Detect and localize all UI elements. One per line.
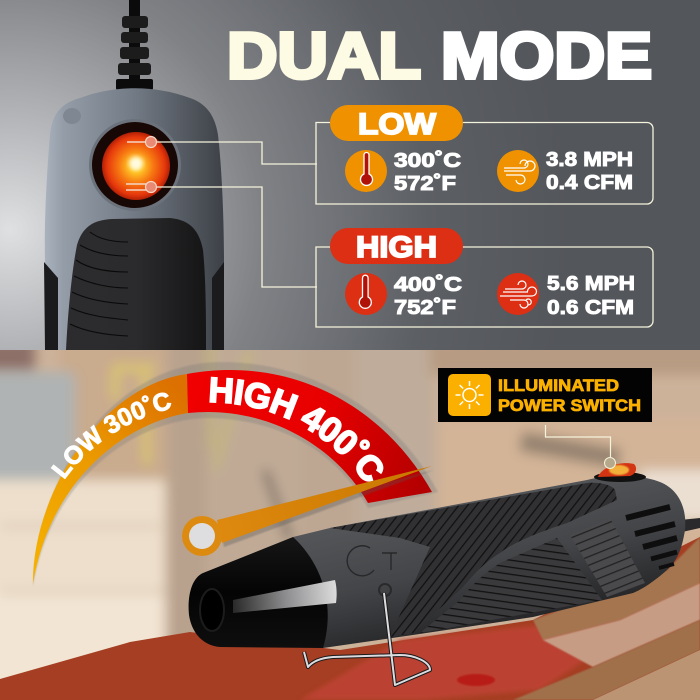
high temperature: 400˚C bbox=[394, 273, 462, 296]
icon: power cord bbox=[116, 0, 153, 90]
high marker bbox=[126, 182, 156, 192]
low temperature bbox=[394, 149, 461, 195]
wooden edge strip bbox=[513, 620, 700, 700]
wire stand bbox=[304, 584, 430, 685]
glowing switch lamp bbox=[102, 132, 170, 200]
gauge: temperature arc bbox=[32, 362, 438, 584]
nozzle bbox=[189, 537, 328, 648]
low pill bbox=[330, 105, 463, 141]
low marker bbox=[127, 136, 156, 148]
high airflow values: 5.6 MPH bbox=[547, 273, 635, 295]
low temperature: 300˚C bbox=[394, 149, 461, 172]
panel: workshop photo background bbox=[0, 350, 700, 679]
high heading: HIGH bbox=[356, 231, 437, 264]
illustration: remote switch device bbox=[44, 0, 224, 350]
brighter red paint bbox=[300, 625, 600, 700]
icon: low airflow bbox=[497, 150, 539, 192]
high temperature: 752˚F bbox=[394, 296, 456, 319]
lower ridged panel bbox=[420, 538, 602, 633]
gauge needle bbox=[182, 466, 434, 556]
low airflow values: 0.4 CFM bbox=[546, 172, 633, 194]
callout: illuminated power switch bbox=[438, 368, 652, 422]
cord bbox=[680, 518, 700, 532]
device black grip bbox=[66, 218, 206, 350]
leader line: callout to switch bbox=[546, 425, 616, 468]
paint spot bbox=[457, 674, 495, 686]
low frame bbox=[316, 122, 653, 204]
title bbox=[227, 19, 652, 92]
device dimple bbox=[63, 108, 81, 124]
icon: low thermometer bbox=[345, 150, 387, 192]
low arc segment bbox=[33, 374, 188, 584]
heat gun tool bbox=[189, 463, 700, 685]
leader line: low bbox=[157, 142, 317, 164]
pink plank bbox=[543, 583, 700, 667]
grip ridges bbox=[70, 232, 128, 336]
high pill bbox=[330, 228, 463, 264]
high airflow values bbox=[547, 273, 635, 319]
device housing bbox=[45, 88, 224, 350]
leader line: high bbox=[157, 187, 317, 287]
callout text: POWER SWITCH bbox=[498, 396, 641, 415]
side ridged panel bbox=[570, 518, 645, 597]
callout text bbox=[498, 376, 641, 415]
panel: dual mode background bbox=[0, 0, 700, 350]
air vents bbox=[626, 507, 677, 568]
illuminated switch bbox=[594, 463, 646, 482]
tool body bbox=[293, 476, 685, 648]
nozzle opening bbox=[200, 589, 224, 631]
icon: sun bbox=[448, 374, 491, 416]
switch bezel bbox=[89, 119, 181, 211]
callout text: ILLUMINATED bbox=[498, 376, 619, 395]
low temperature: 572˚F bbox=[394, 172, 456, 195]
logo mark bbox=[347, 546, 397, 576]
low heading: LOW bbox=[358, 108, 437, 141]
upper ridged grip bbox=[330, 483, 617, 637]
wooden table bbox=[0, 537, 700, 700]
low airflow values bbox=[546, 149, 633, 194]
panel: high mode bbox=[316, 228, 653, 327]
nozzle highlight bbox=[233, 580, 337, 613]
title: DUAL bbox=[227, 19, 421, 92]
low label: LOW 300˚C bbox=[50, 392, 172, 480]
high frame bbox=[316, 247, 653, 327]
lower plank bbox=[593, 650, 700, 700]
low airflow values: 3.8 MPH bbox=[546, 149, 633, 171]
icon: high airflow bbox=[497, 273, 539, 315]
high airflow values: 0.6 CFM bbox=[547, 297, 634, 319]
high arc segment bbox=[187, 370, 432, 503]
arc shadow bbox=[33, 362, 438, 587]
title: MODE bbox=[441, 19, 652, 92]
device side grips bbox=[44, 262, 224, 350]
icon: high thermometer bbox=[345, 273, 387, 315]
panel: low mode bbox=[316, 105, 653, 204]
high temperature bbox=[394, 273, 462, 319]
brown plank band bbox=[533, 537, 700, 640]
high label: HIGH 400˚C bbox=[209, 376, 384, 482]
red table surface bbox=[0, 537, 700, 700]
